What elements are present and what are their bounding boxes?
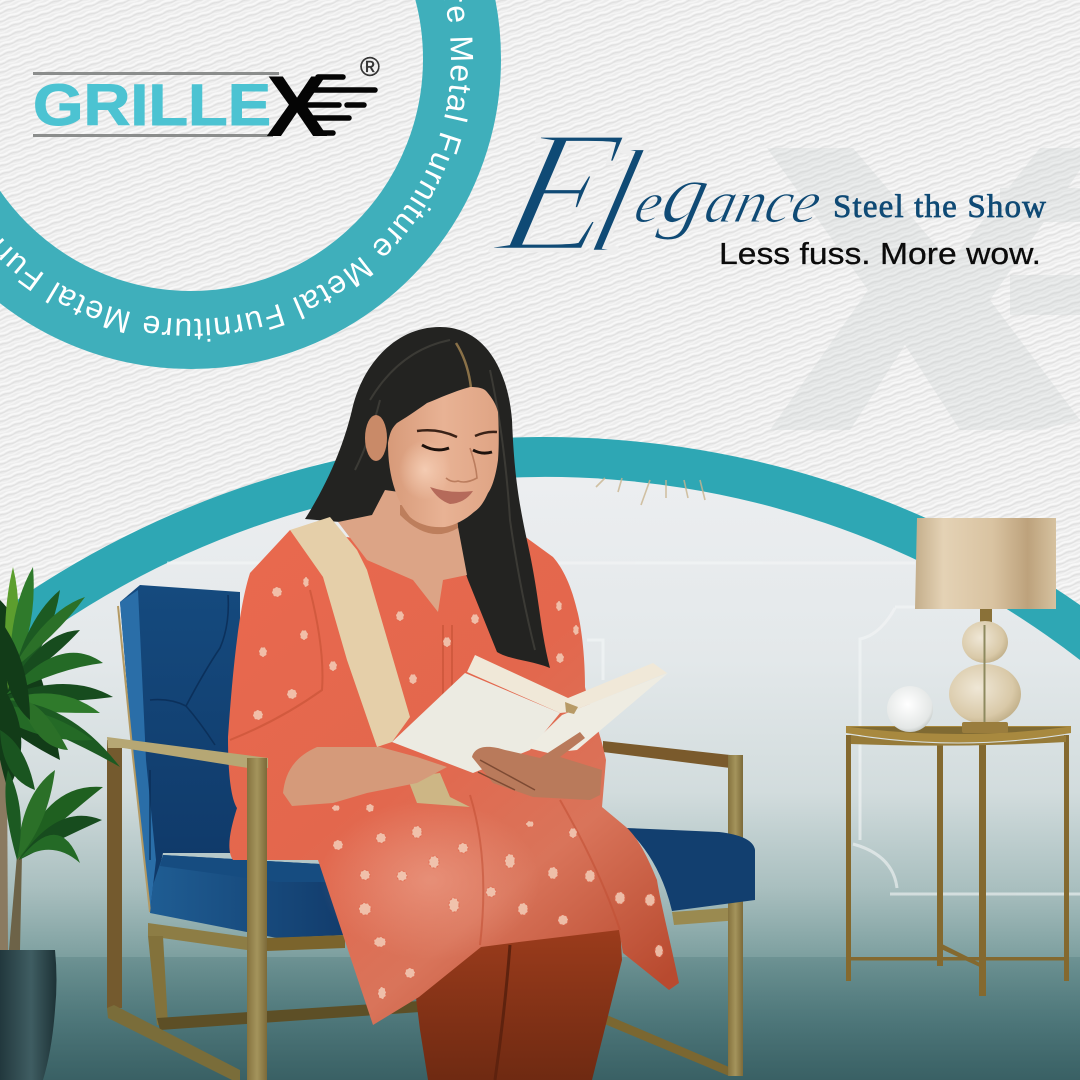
kurta — [228, 530, 679, 1025]
eyebrows — [417, 430, 497, 437]
glass body lower — [949, 664, 1021, 724]
hair — [305, 327, 550, 668]
circular teal ring — [0, 0, 501, 369]
shawl lower end — [407, 773, 470, 807]
Grillex logo: GRILLE — [33, 73, 271, 138]
lamp base — [962, 722, 1008, 733]
Grillex logo — [33, 52, 380, 155]
mouth — [430, 487, 473, 504]
reading hand — [472, 732, 602, 800]
left forearm — [283, 747, 447, 806]
eyes — [422, 445, 492, 453]
book spine gap — [565, 702, 578, 714]
armchair front frame — [107, 737, 268, 1080]
armchair back parts — [107, 585, 755, 1080]
script word Elegance: ance — [699, 170, 828, 236]
subtitle: Steel the Show — [833, 189, 1046, 225]
Grillex logo: ® — [360, 52, 380, 82]
lamp shade — [915, 518, 1056, 609]
near front post — [247, 758, 267, 1080]
glass body upper — [962, 621, 1008, 663]
floor — [0, 957, 1080, 1080]
far post — [728, 755, 743, 1076]
near arm rail — [107, 737, 268, 768]
plant leaves — [0, 567, 120, 863]
seated woman reading — [228, 327, 679, 1080]
wall moulding — [167, 563, 1080, 894]
script word Elegance: E — [480, 95, 638, 288]
room wall and floor — [0, 477, 1080, 1080]
hair strands — [355, 340, 535, 650]
script word Elegance: l — [574, 118, 658, 284]
skirt highlight — [320, 800, 540, 960]
teal arch band — [0, 437, 1080, 1080]
nose — [446, 448, 477, 482]
kurta print motifs — [253, 577, 663, 999]
plant pot — [0, 950, 56, 1080]
back cushion — [120, 585, 240, 912]
book cover right — [528, 673, 668, 753]
trousers — [415, 925, 622, 1080]
lamp — [915, 518, 1056, 733]
script word Elegance: e — [629, 171, 671, 235]
bottom frame rails — [107, 923, 420, 1080]
seat cushion — [150, 855, 345, 938]
kurta folds — [230, 590, 620, 945]
cheek highlight — [399, 440, 451, 500]
wall starburst mirror — [596, 478, 705, 505]
cushion tufting — [150, 595, 228, 860]
plant stems — [0, 760, 8, 950]
hair parting — [456, 343, 471, 388]
ear — [365, 415, 387, 461]
far side rails — [595, 741, 740, 1076]
face — [388, 387, 499, 527]
neck — [338, 490, 467, 612]
dupatta shawl — [290, 517, 410, 747]
lamp stem — [980, 609, 992, 625]
script word Elegance: g — [653, 145, 720, 241]
potted plant — [0, 567, 120, 1080]
watermark X — [767, 148, 1080, 430]
book — [392, 655, 668, 773]
book pages — [467, 655, 667, 713]
table top tray — [846, 726, 1071, 742]
side table — [846, 726, 1071, 996]
headline — [480, 95, 1046, 288]
book cover left — [392, 673, 560, 773]
tagline: Less fuss. More wow. — [719, 236, 1041, 271]
Grillex logo: X — [266, 59, 328, 155]
crystal ball — [887, 686, 933, 732]
back post — [107, 740, 122, 1008]
